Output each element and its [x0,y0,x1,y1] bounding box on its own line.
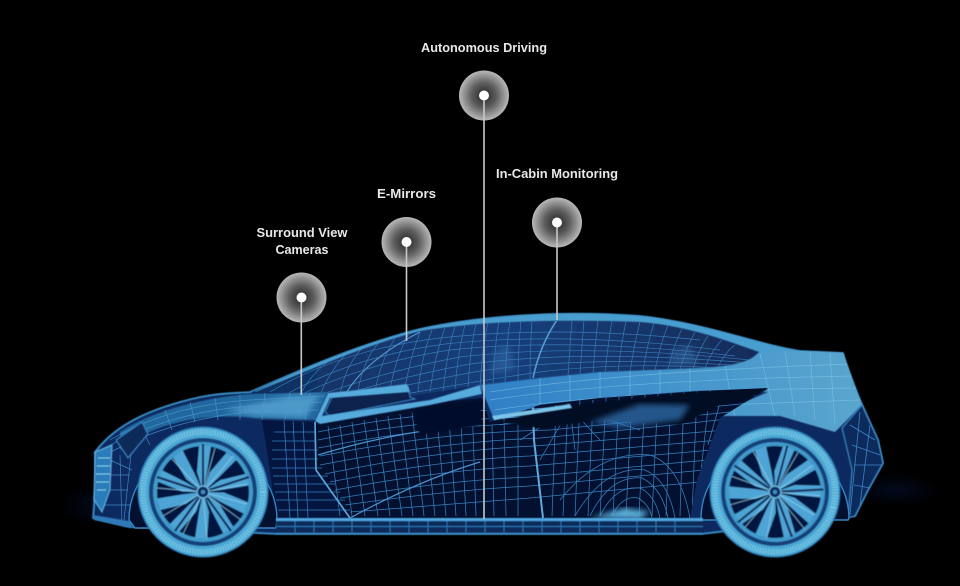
front door top trim and mirror [315,384,482,424]
rocker panel [276,518,703,534]
marker dot [479,90,489,100]
marker [459,70,509,120]
window mesh [270,320,750,395]
marker [382,217,432,267]
front wheel arch [129,446,277,528]
floor glow right [850,474,940,506]
dark door reflection [412,402,482,435]
infographic: connected car applications [71,42,928,558]
leader line [406,242,407,341]
hood panel [120,392,328,450]
floor glow left [60,485,140,525]
marker [532,198,582,248]
callout: autonomous driving [421,41,547,519]
callout: e-mirrors [377,187,436,341]
seat silhouettes in window [490,345,698,375]
callout: surround view cameras [256,226,348,395]
door mesh [272,390,770,518]
callout: in-cabin monitoring [496,167,618,320]
marker dot [296,292,306,302]
rear quarter panel [480,351,862,432]
label: surround view cameras: Surround View [256,226,348,240]
leader line [556,223,558,320]
label: autonomous driving: Autonomous Driving [421,41,547,55]
rear tail mesh [850,412,882,515]
front fender panel [262,420,350,518]
quarter panel mesh [490,351,860,425]
marker dot [552,218,562,228]
marker dot [402,237,412,247]
inner door highlights [590,404,690,428]
leader line [300,298,302,395]
mirror area dark glass [325,386,415,416]
label: in-cabin monitoring: In-Cabin Monitoring [496,167,618,181]
rear wheel arch [701,445,849,520]
front fender mesh [100,393,325,525]
front headlight and bumper [93,422,148,528]
leader line [483,96,485,519]
front wheel [138,427,268,557]
rear dark reflection [500,389,768,428]
label: surround view cameras: Cameras [276,243,329,257]
label: e-mirrors: E-Mirrors [377,187,436,201]
windows [252,321,759,396]
door sill glow [590,508,650,519]
roof band [255,314,850,392]
lower body dark panels [315,388,768,518]
wireframe car [93,314,883,572]
marker [276,272,326,322]
rear tail panel [842,405,883,518]
hood highlight [225,395,320,418]
rear wheel [695,412,855,572]
car body silhouette [93,314,883,534]
door handle strip [492,404,572,420]
